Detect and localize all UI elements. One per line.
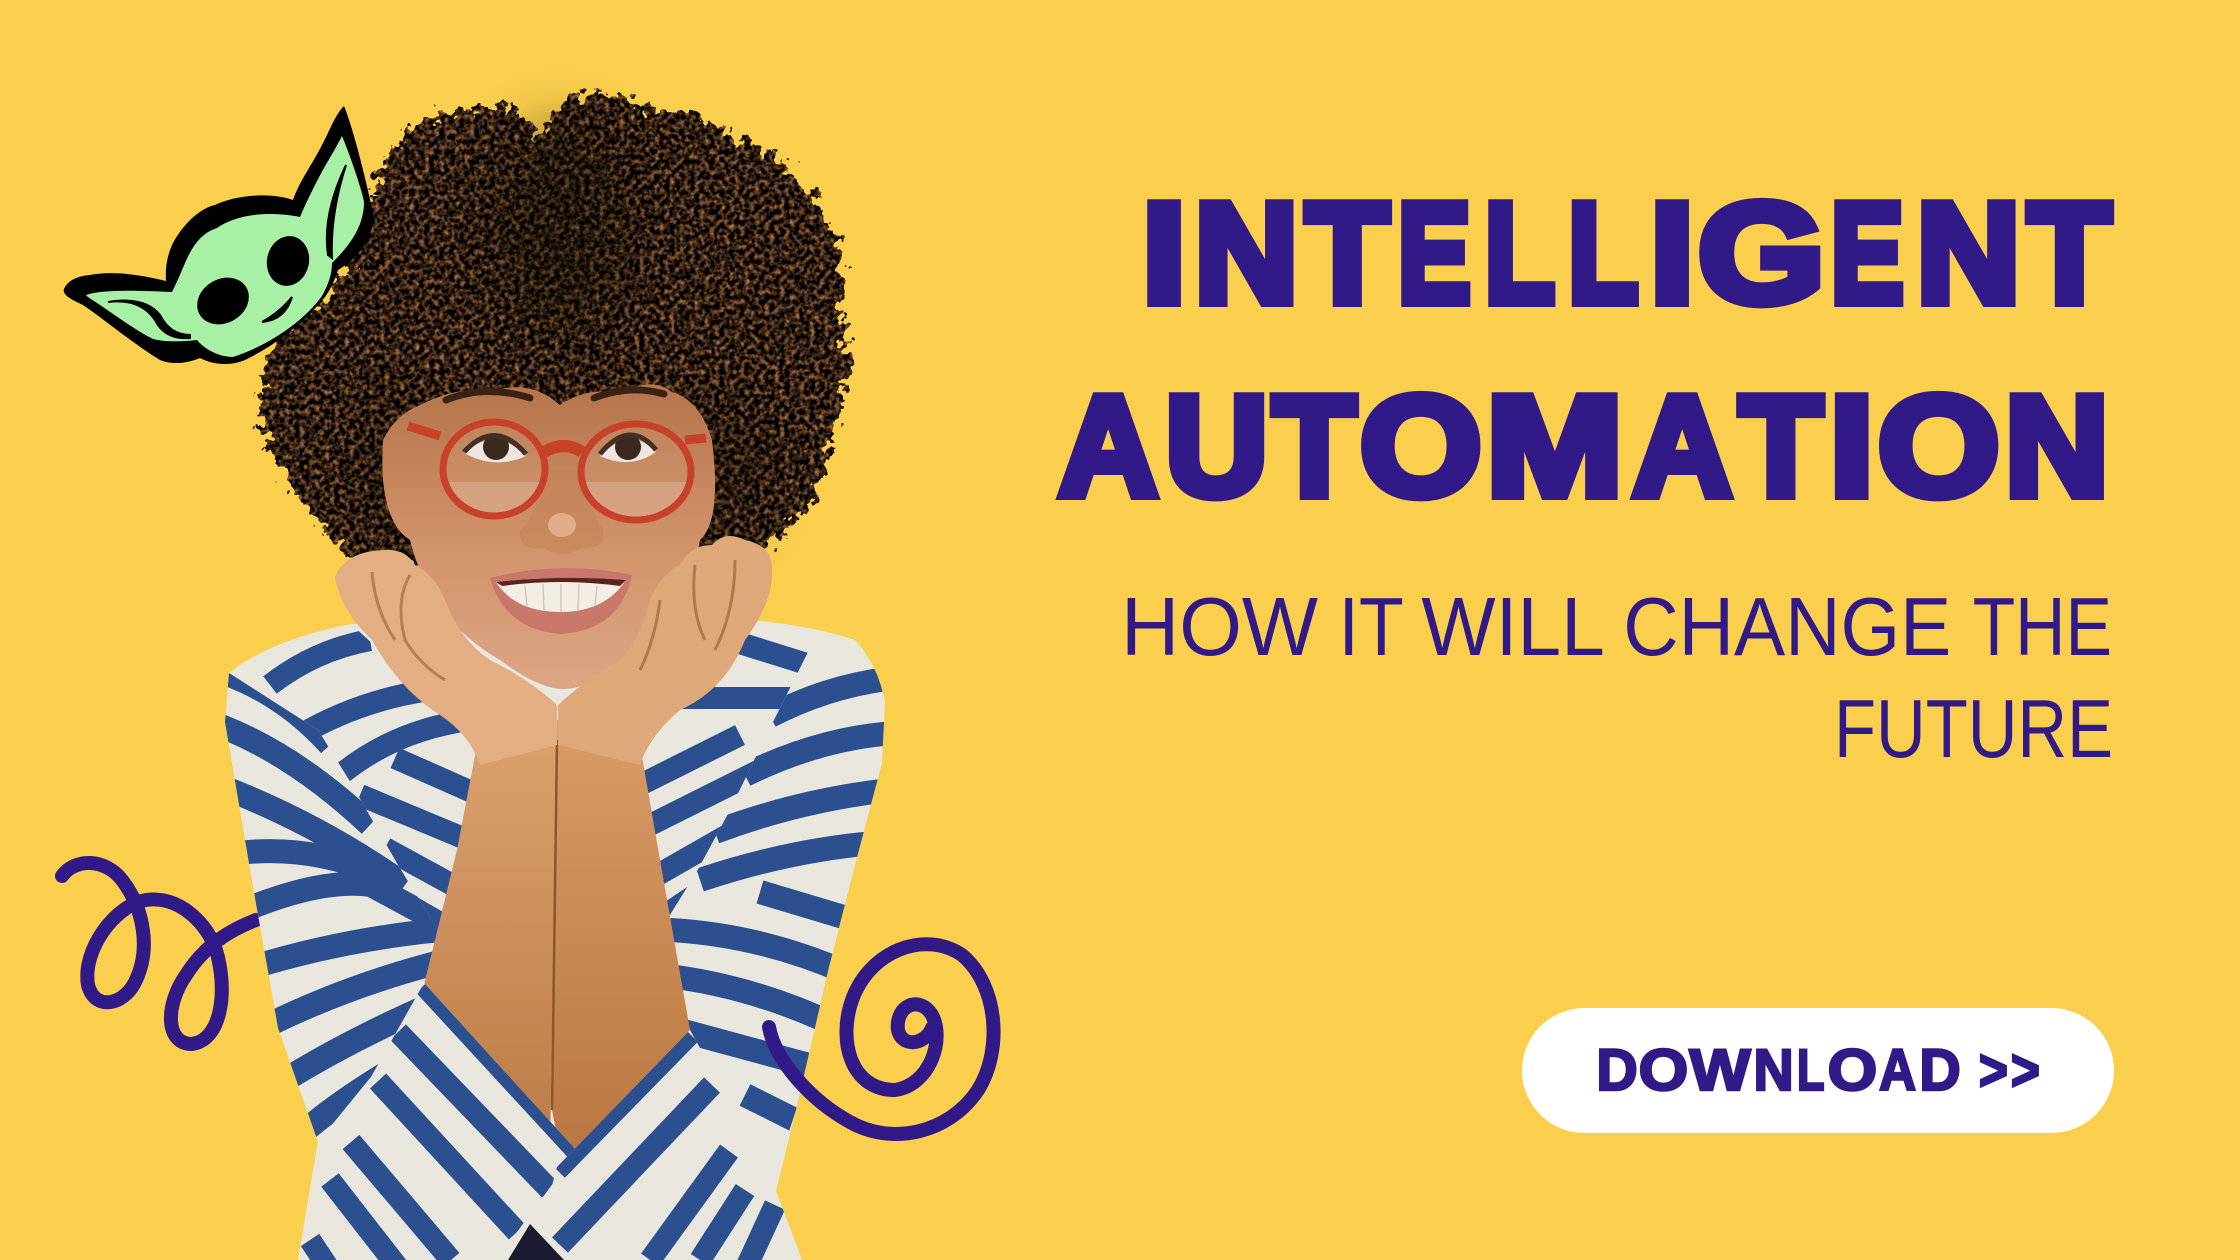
face <box>382 384 715 689</box>
title line 2: O <box>1360 367 1482 526</box>
left forearm <box>424 720 557 1150</box>
download button: W <box>1689 1038 1751 1103</box>
woman photo illustration <box>210 90 895 1260</box>
title line 1: E <box>1831 174 1904 333</box>
left hand <box>335 550 557 765</box>
right cuff <box>552 1030 802 1260</box>
title line 2: I <box>1830 367 1874 526</box>
shirt hem centre <box>508 1224 564 1260</box>
arm divide <box>552 740 557 1110</box>
subtitle line 1: IT <box>1338 580 1402 673</box>
title line 1: E <box>1398 174 1471 333</box>
download button: A <box>1879 1038 1916 1103</box>
download button: D <box>1919 1038 1961 1103</box>
title line 2: U <box>1165 367 1268 526</box>
title line 2: A <box>1059 367 1158 526</box>
subtitle line 2: FUTURE <box>1834 682 2113 775</box>
red glasses <box>408 422 706 520</box>
download button: L <box>1797 1038 1825 1103</box>
eyebrows <box>446 390 664 400</box>
right sleeve stripes <box>660 678 895 1125</box>
hair dark patches <box>372 120 758 540</box>
alien eyes <box>189 268 257 334</box>
title line 2: N <box>2005 367 2109 526</box>
title line 1: I <box>1650 174 1694 333</box>
title line 1: G <box>1698 174 1825 333</box>
download button <box>1522 1008 2114 1133</box>
subtitle <box>1121 580 2113 775</box>
icon: right purple spiral <box>769 944 994 1134</box>
nose <box>520 470 603 554</box>
download button: > <box>2011 1038 2040 1103</box>
eyes <box>464 434 656 462</box>
download button: D <box>1596 1038 1638 1103</box>
download button: N <box>1754 1038 1794 1103</box>
title line 2: T <box>1739 367 1822 526</box>
striped shirt <box>210 620 895 1260</box>
title line 2: T <box>1273 367 1356 526</box>
right forearm <box>552 720 690 1170</box>
title line 2: O <box>1878 367 1999 526</box>
icon: left purple squiggle <box>62 863 256 1044</box>
right body stripes <box>644 634 808 916</box>
title line 1: I <box>1142 174 1186 333</box>
title line 1: L <box>1568 174 1638 333</box>
subtitle line 1: WILL <box>1421 580 1603 673</box>
title: Intelligent Automation <box>1059 174 2111 526</box>
title line 2: A <box>1633 367 1732 526</box>
title line 1: N <box>1195 174 1298 333</box>
mouth and teeth <box>490 568 632 634</box>
subtitle line 1: THE <box>1973 580 2112 673</box>
subtitle line 1: CHANGE <box>1623 580 1951 673</box>
title line 1: N <box>1917 174 2020 333</box>
download button: O <box>1828 1038 1877 1103</box>
hair <box>261 90 847 570</box>
download button: > <box>1979 1038 2008 1103</box>
subtitle line 1: HOW <box>1121 580 1319 673</box>
alien details <box>108 165 346 338</box>
download button: O <box>1639 1038 1688 1103</box>
icon: green alien head sticker <box>64 106 373 364</box>
title line 2: M <box>1486 367 1623 526</box>
left cuff <box>290 980 590 1260</box>
left sleeve stripes <box>210 670 445 1135</box>
title line 1: L <box>1485 174 1555 333</box>
title line 1: T <box>2028 174 2111 333</box>
title line 1: T <box>1306 174 1389 333</box>
left body stripes <box>270 640 490 940</box>
right hand <box>558 536 772 765</box>
